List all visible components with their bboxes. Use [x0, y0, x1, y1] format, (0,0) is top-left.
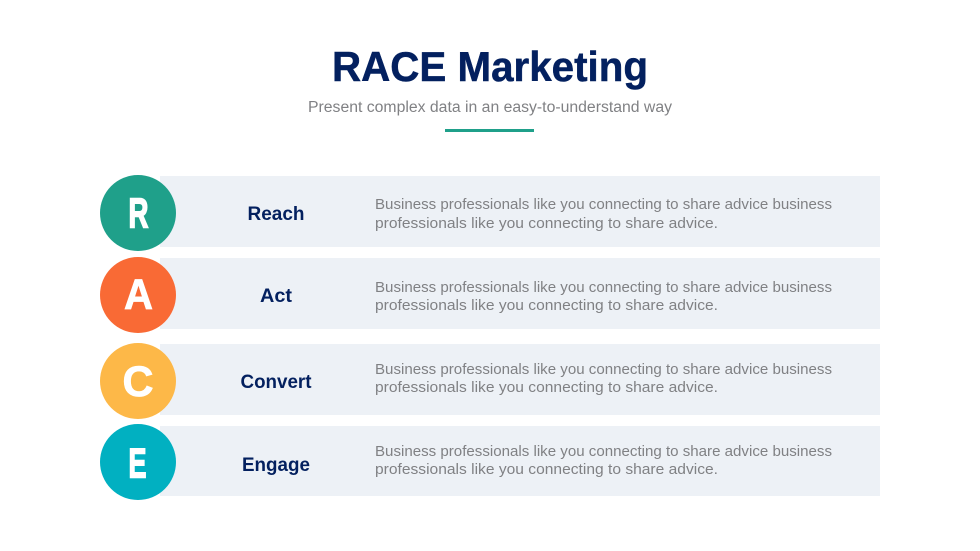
description: Engage: professionals like you connecting to share advice.: [375, 461, 718, 478]
icon: letter C circle: [100, 343, 176, 419]
icon: letter R circle: R: [128, 189, 149, 236]
icon: letter R circle: [100, 175, 176, 251]
row background: Act: [160, 258, 880, 329]
row background: Reach: [160, 176, 880, 247]
description: Engage: Business professionals like you connecting to share advice business: [375, 443, 832, 460]
icon: letter A circle: [100, 257, 176, 333]
label: Engage: Engage: [242, 454, 310, 476]
description: Reach: Business professionals like you connecting to share advice business: [375, 196, 832, 213]
title accent underline: [445, 129, 534, 132]
panel: Engage: [100, 424, 880, 500]
description: Act: Business professionals like you connecting to share advice business: [375, 279, 832, 296]
panel: Reach: [100, 175, 880, 251]
description: Act: [375, 279, 832, 314]
label: Convert: Convert: [240, 371, 312, 393]
subtitle: Present complex data in an easy-to-understand way: [308, 99, 672, 116]
icon: letter A circle: A: [124, 272, 153, 319]
icon: letter E circle: [100, 424, 176, 500]
label: Reach: Reach: [248, 203, 304, 225]
description: Convert: [375, 361, 832, 396]
description: Reach: professionals like you connecting to share advice.: [375, 215, 718, 232]
row background: Convert: [160, 344, 880, 415]
label: Act: Act: [260, 285, 293, 307]
icon: letter E circle: E: [128, 439, 146, 486]
description: Engage: [375, 443, 832, 478]
icon: letter C circle: C: [122, 359, 154, 406]
description: Convert: professionals like you connecting to share advice.: [375, 379, 718, 396]
description: Reach: [375, 196, 832, 232]
title: RACE Marketing: [332, 43, 648, 90]
description: Convert: Business professionals like you connecting to share advice business: [375, 361, 832, 378]
panel: Act: [100, 257, 880, 333]
row background: Engage: [160, 426, 880, 496]
panel: Convert: [100, 343, 880, 419]
description: Act: professionals like you connecting to share advice.: [375, 297, 718, 314]
